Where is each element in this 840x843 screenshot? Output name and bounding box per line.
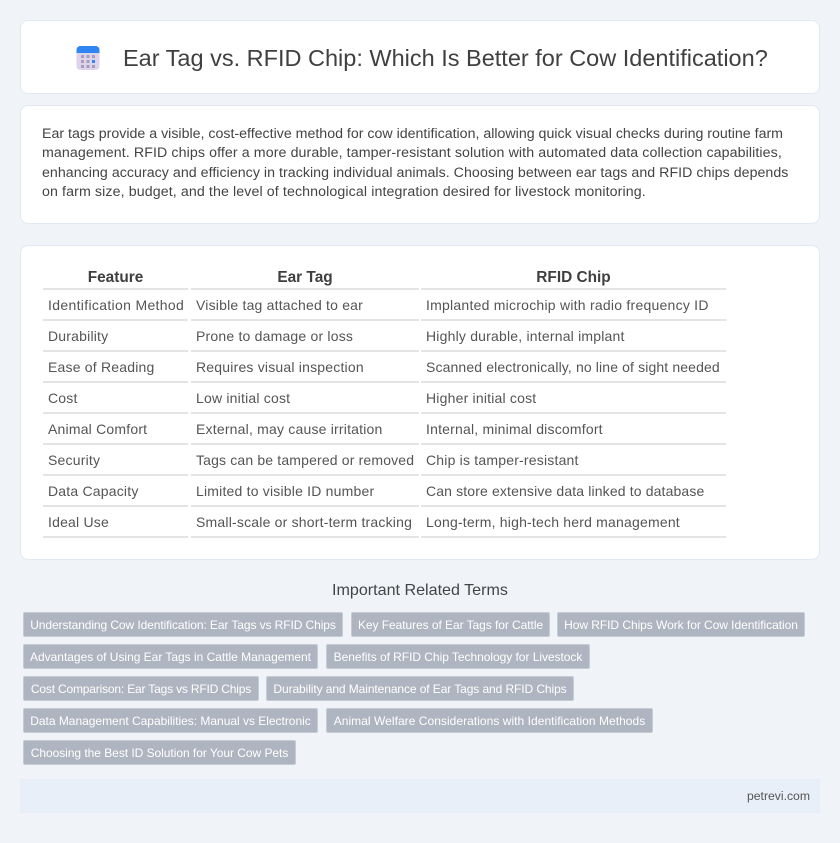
tag: [23, 676, 259, 701]
tag: Data Management Capabilities: Manual vs Electronic: [30, 714, 311, 728]
comparison table: Limited to visible ID number: [196, 483, 374, 499]
comparison table: Feature: [88, 269, 143, 286]
panel: comparison table: [20, 245, 820, 560]
comparison table: Scanned electronically, no line of sight needed: [426, 359, 720, 375]
comparison table: Internal, minimal discomfort: [426, 421, 603, 437]
tag: Key Features of Ear Tags for Cattle: [358, 618, 543, 632]
text block: introduction: Ear tags provide a visible, cost-effective method for cow identification, allowing quick visual checks during routine farm: [42, 126, 783, 142]
comparison table: Cost: [48, 390, 78, 406]
comparison table: Identification Method: [48, 297, 184, 313]
comparison table: Higher initial cost: [426, 390, 536, 406]
text block: introduction: enhancing accuracy and efficiency in tracking individual animals. Choosing between ear tags and RFID chips depends: [42, 165, 788, 181]
comparison table: Animal Comfort: [48, 421, 147, 437]
panel: introduction text: [20, 105, 820, 224]
comparison table: Implanted microchip with radio frequency ID: [426, 297, 709, 313]
comparison table: Low initial cost: [196, 390, 290, 406]
tag: Benefits of RFID Chip Technology for Livestock: [334, 650, 582, 664]
comparison table: RFID Chip: [536, 269, 611, 286]
tag: How RFID Chips Work for Cow Identification: [564, 618, 798, 632]
comparison table: Prone to damage or loss: [196, 328, 353, 344]
tag: Choosing the Best ID Solution for Your Cow Pets: [31, 746, 288, 760]
text block: introduction: management. RFID chips offer a more durable, tamper-resistant solution with automated data collection capabilities,: [42, 145, 782, 161]
tag: Advantages of Using Ear Tags in Cattle Management: [30, 650, 311, 664]
tag: Durability and Maintenance of Ear Tags and RFID Chips: [273, 682, 567, 696]
footer bar: [20, 779, 820, 813]
tag: [326, 708, 653, 733]
text block: introduction: [42, 126, 788, 200]
comparison table: Data Capacity: [48, 483, 139, 499]
comparison table: Ease of Reading: [48, 359, 155, 375]
tag: [266, 676, 574, 701]
header panel: [20, 20, 820, 94]
comparison table: Small-scale or short-term tracking: [196, 514, 412, 530]
comparison table: Can store extensive data linked to database: [426, 483, 704, 499]
tag: [23, 708, 318, 733]
comparison table: Durability: [48, 328, 108, 344]
comparison table: Visible tag attached to ear: [196, 297, 363, 313]
comparison table: Security: [48, 452, 100, 468]
icon: calendar: [76, 46, 100, 70]
tag: Cost Comparison: Ear Tags vs RFID Chips: [31, 682, 251, 696]
tag: [351, 612, 550, 637]
tag: [557, 612, 805, 637]
heading: related terms: Important Related Terms: [332, 581, 508, 599]
tag: [23, 644, 318, 669]
comparison table: Chip is tamper-resistant: [426, 452, 579, 468]
footer site name: petrevi.com: [747, 789, 810, 803]
comparison table: Highly durable, internal implant: [426, 328, 625, 344]
comparison table: [43, 269, 726, 538]
tag: [23, 612, 343, 637]
related term tags: [23, 612, 805, 765]
comparison table: Tags can be tampered or removed: [196, 452, 414, 468]
title: Ear Tag vs. RFID Chip: Which Is Better for Cow Identification?: [123, 45, 768, 71]
comparison table: Long-term, high-tech herd management: [426, 514, 680, 530]
comparison table: Ideal Use: [48, 514, 109, 530]
tag: [23, 740, 296, 765]
comparison table: Requires visual inspection: [196, 359, 364, 375]
text block: introduction: on farm size, budget, and the level of technological integration desired for livestock monitoring.: [42, 184, 646, 200]
comparison table: External, may cause irritation: [196, 421, 383, 437]
comparison table: Ear Tag: [277, 269, 333, 286]
tag: Animal Welfare Considerations with Identification Methods: [334, 714, 645, 728]
tag: [326, 644, 590, 669]
tag: Understanding Cow Identification: Ear Tags vs RFID Chips: [30, 618, 336, 632]
